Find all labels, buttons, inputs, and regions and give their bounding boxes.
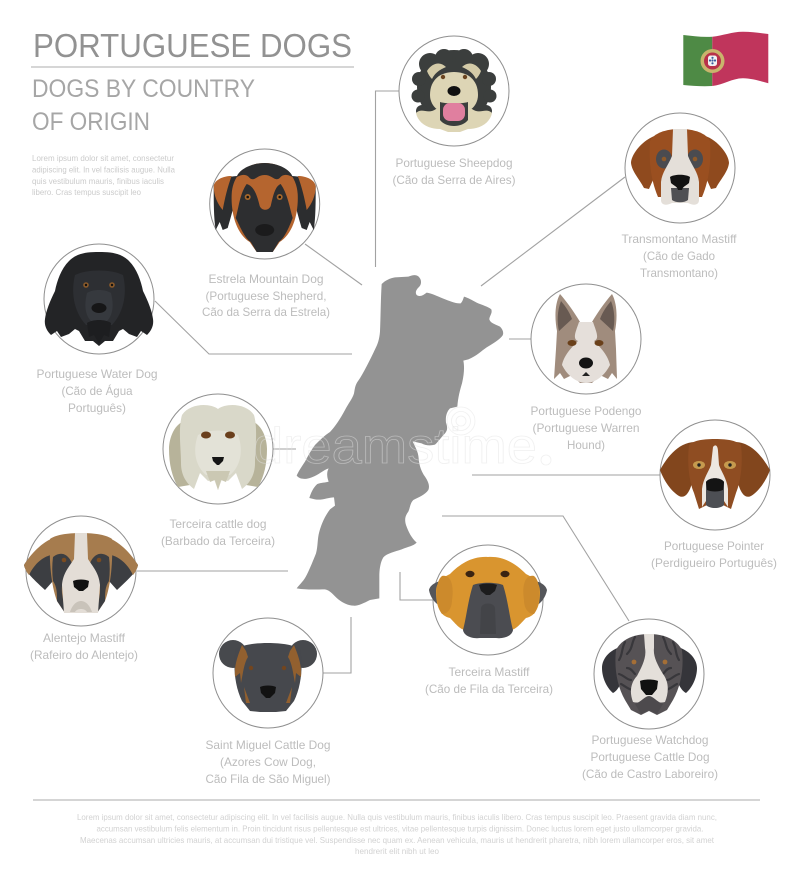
label: (Rafeiro do Alentejo): [30, 648, 138, 662]
label: (Cão de Gado: [643, 249, 715, 263]
subtitle: [32, 75, 255, 136]
label: Transmontano): [640, 266, 718, 280]
intro text block: [32, 153, 175, 197]
icon: Portugal flag: [683, 32, 768, 86]
label: Portuguese Sheepdog: [396, 156, 512, 170]
subtitle: OF ORIGIN: [32, 108, 150, 136]
connector: Transmontano Mastiff: [481, 177, 625, 286]
watermark: dreamstime: [253, 418, 537, 474]
label: Portuguese Cattle Dog: [590, 750, 710, 764]
label: Portuguese Podengo: [530, 404, 642, 418]
label: (Azores Cow Dog,: [220, 755, 316, 769]
icon: Barbado head: [169, 405, 267, 490]
icon: Pointer head: [660, 439, 770, 509]
intro text block: quis vestibulum mauris, finibus iaculis: [32, 176, 164, 186]
label: (Portuguese Shepherd,: [206, 289, 326, 303]
label: Cão da Serra da Estrela): [202, 305, 330, 319]
label: Terceira cattle dog: [170, 517, 266, 531]
panel: Alentejo Mastiff: [24, 516, 138, 662]
icon: water dog head: [45, 252, 153, 346]
label: Cão Fila de São Miguel): [206, 772, 330, 786]
intro text block: Lorem ipsum dolor sit amet, consectetur: [32, 153, 174, 163]
panel: Portuguese Pointer: [651, 420, 777, 570]
intro text block: libero. Cras tempus suscipit leo: [32, 187, 141, 197]
icon: Alentejo head: [24, 533, 138, 613]
label: (Cão de Água: [62, 383, 133, 398]
label: (Barbado da Terceira): [161, 534, 275, 548]
icon: Estrela head: [214, 163, 316, 252]
label: [425, 665, 553, 696]
label: Estrela Mountain Dog: [208, 272, 324, 286]
label: (Perdigueiro Português): [651, 556, 777, 570]
connector: Terceira cattle dog: [273, 448, 296, 450]
panel: Transmontano Mastiff: [622, 113, 737, 280]
icon: sheepdog head: [412, 49, 496, 132]
label: (Cão de Fila da Terceira): [425, 682, 553, 696]
footer text block: hendrerit elit nibh ut leo: [355, 846, 439, 856]
panel: Portuguese Podengo: [530, 284, 642, 452]
connector: Water Dog: [155, 301, 352, 354]
connector: Portuguese Pointer: [472, 474, 660, 476]
label: Portuguese Water Dog: [36, 367, 158, 381]
map of Portugal: [297, 275, 503, 606]
label: [161, 517, 275, 548]
icon: Terceira Mastiff head: [429, 557, 547, 638]
label: (Portuguese Warren: [532, 421, 640, 435]
label: [202, 272, 330, 319]
label: Hound): [567, 438, 605, 452]
footer text block: Maecenas accumsan ultricies mauris, at accumsan dui tristique vel. Suspendisse nec quam ex. Aenean vehicula, mauris ut hendrerit pharetra, nibh lorem ullamcorper eros, sit amet: [80, 835, 715, 845]
footer text block: accumsan vestibulum felis elementum in. Proin tincidunt risus pellentesque est ultrices, vitae pellentesque turpis dignissim. Donec luctus lorem eget justo ullamcorper gravida.: [96, 824, 704, 834]
icon: Podengo head: [554, 294, 617, 383]
panel: Portuguese Sheepdog: [392, 36, 516, 187]
label: [36, 367, 158, 415]
icon: Transmontano head: [631, 129, 729, 205]
label: (Cão de Castro Laboreiro): [582, 767, 718, 781]
panel: Portuguese Water Dog: [36, 244, 158, 415]
label: Terceira Mastiff: [448, 665, 530, 679]
connector: Saint Miguel Cattle Dog: [323, 617, 351, 673]
label: [206, 738, 330, 786]
panel: Terceira Mastiff: [425, 545, 553, 696]
connector: Portuguese Watchdog: [442, 516, 629, 621]
label: [651, 539, 777, 570]
label: Transmontano Mastiff: [622, 232, 737, 246]
connector: Estrela Mountain Dog: [305, 244, 362, 285]
label: [392, 156, 516, 187]
icon: Watchdog head: [602, 634, 697, 715]
panel: Portuguese Watchdog: [582, 619, 718, 781]
label: [622, 232, 737, 280]
label: Portuguese Pointer: [664, 539, 764, 553]
label: [530, 404, 642, 452]
panel: Estrela Mountain Dog: [202, 149, 330, 319]
label: (Cão da Serra de Aires): [392, 173, 516, 187]
label: [30, 631, 138, 662]
footer text block: Lorem ipsum dolor sit amet, consectetur adipiscing elit. In vel facilisis augue. Nulla quis vestibulum mauris, finibus iaculis libero. Cras tempus suscipit leo. Praesent gravida diam nunc,: [77, 812, 717, 822]
panel: Terceira cattle dog: [161, 394, 275, 548]
connector: Alentejo Mastiff: [137, 570, 288, 572]
label: Portuguese Watchdog: [592, 733, 708, 747]
intro text block: adipiscing elit. In vel facilisis augue. Nulla: [32, 164, 175, 174]
connector: Podengo: [509, 338, 531, 340]
footer text block: [77, 812, 717, 856]
subtitle: DOGS BY COUNTRY: [32, 75, 255, 103]
label: [582, 733, 718, 781]
panel: Saint Miguel Cattle Dog: [206, 618, 330, 786]
icon: Saint Miguel head: [219, 640, 317, 712]
label: Saint Miguel Cattle Dog: [206, 738, 330, 752]
connector: Terceira Mastiff: [400, 572, 433, 600]
label: Alentejo Mastiff: [43, 631, 126, 645]
connector: Sheepdog: [376, 91, 399, 267]
title: PORTUGUESE DOGS: [33, 27, 352, 64]
label: Português): [68, 401, 126, 415]
